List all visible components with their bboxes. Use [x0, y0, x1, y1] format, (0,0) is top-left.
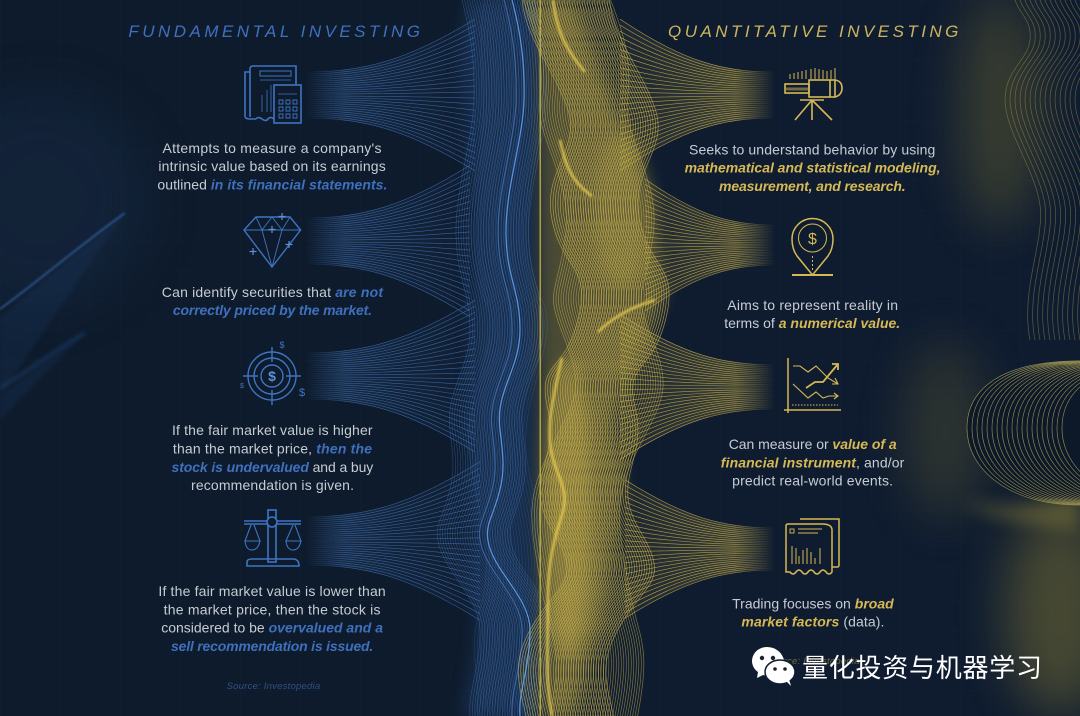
left corner mesh and diagonal rays [0, 90, 150, 420]
watermark: wechat logo [752, 647, 795, 686]
title: quantitative investing: QUANTITATIVE INVESTING [668, 22, 958, 41]
text block: intrinsic value [157, 140, 387, 192]
text block: overvalued [158, 583, 386, 654]
title: fundamental investing: FUNDAMENTAL INVESTING [128, 22, 420, 41]
icon: map pin with dollar: $ [808, 231, 817, 248]
icon: chart with trend lines [784, 358, 841, 413]
text block: overvalued: If the fair market value is lower than [158, 583, 386, 599]
icon: map pin with dollar [792, 218, 833, 275]
text block: intrinsic value: Attempts to measure a company's [162, 140, 382, 156]
text block: undervalued: If the fair market value is higher [172, 422, 373, 438]
text block: overvalued: the market price, then the stock is [164, 602, 380, 618]
text block: mispriced securities [162, 284, 384, 318]
watermark: account name: 量化投资与机器学习 [802, 653, 1042, 683]
text block: undervalued: stock is undervalued and a buy [172, 459, 373, 475]
text block: undervalued: than the market price, then the [173, 440, 372, 456]
text block: overvalued: sell recommendation is issued. [171, 638, 373, 654]
text block: mispriced securities: correctly priced by the market. [173, 302, 372, 318]
text block: financial instrument [721, 436, 905, 488]
text block: modeling: mathematical and statistical modeling, [685, 160, 940, 176]
text block: market factors: market factors (data). [741, 614, 884, 630]
right haze and edge contour lines [905, 0, 1080, 715]
icon: target with dollar signs: $ [279, 340, 285, 350]
text block: modeling [685, 142, 940, 194]
text block: financial instrument: financial instrument, and/or [721, 454, 905, 470]
text block: intrinsic value: intrinsic value based on its earnings [158, 158, 386, 174]
text block: financial instrument: Can measure or value of a [729, 436, 897, 452]
text block: market factors [732, 596, 894, 630]
left blue line fans [305, 19, 480, 620]
text block: numerical value [724, 297, 900, 331]
text block: intrinsic value: outlined in its financial statements. [157, 176, 387, 192]
icon: diamond [244, 213, 301, 267]
text block: modeling: measurement, and research. [719, 178, 906, 194]
source: left: Source: Investopedia [227, 681, 320, 692]
source: right, under watermark: Source: Investopedia [766, 656, 860, 667]
icon: balance scale [244, 510, 301, 566]
icon: target with dollar signs: $ [240, 383, 244, 390]
left blue wave band [437, 0, 552, 716]
text block: modeling: Seeks to understand behavior by using [689, 142, 935, 158]
text block: undervalued: recommendation is given. [191, 477, 354, 493]
text block: overvalued: considered to be overvalued and a [161, 620, 383, 636]
icon: target with dollar signs: $ [268, 368, 276, 384]
icon: financial statements and calculator [245, 66, 301, 123]
icon: telescope with bars [785, 68, 842, 120]
icon: target with dollar signs: $ [299, 387, 305, 399]
text block: numerical value: terms of a numerical value. [724, 315, 900, 331]
right yellow wave mass [518, 0, 669, 716]
icon: data report pages [786, 519, 839, 574]
text block: financial instrument: predict real-world events. [732, 472, 893, 488]
text block: market factors: Trading focuses on broad [732, 596, 894, 612]
icon: target with dollar signs [240, 340, 305, 405]
right yellow line fans [620, 19, 775, 618]
text block: numerical value: Aims to represent reality in [727, 297, 898, 313]
text block: mispriced securities: Can identify securities that are not [162, 284, 384, 300]
text block: undervalued [172, 422, 373, 493]
